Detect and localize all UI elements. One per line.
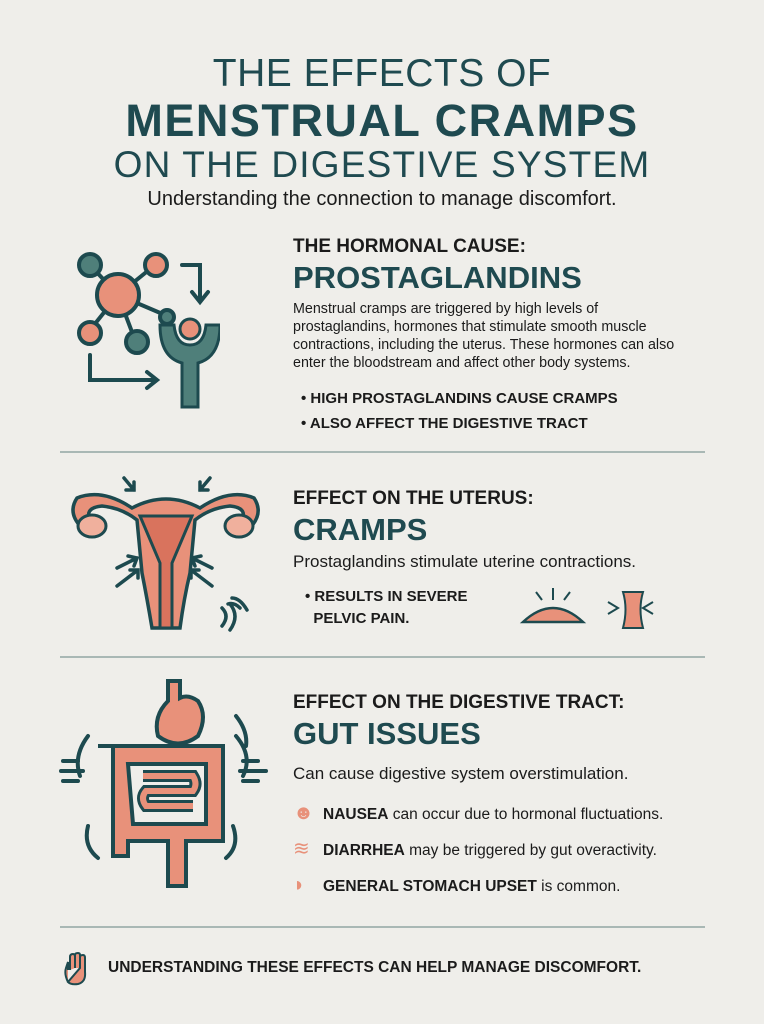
bullets (301, 390, 618, 432)
paragraph: Menstrual cramps are triggered by high levels of (293, 301, 598, 317)
list: symptoms: ☻ (293, 802, 314, 824)
title: ON THE DIGESTIVE SYSTEM (114, 144, 650, 185)
paragraph (293, 301, 674, 371)
section 1 text (293, 236, 674, 432)
icon: digestive tract (59, 679, 268, 888)
bullets: • HIGH PROSTAGLANDINS CAUSE CRAMPS (301, 390, 618, 407)
icon: contraction (520, 588, 654, 629)
bullets: • ALSO AFFECT THE DIGESTIVE TRACT (301, 415, 588, 432)
title (114, 52, 650, 185)
bullet (305, 588, 468, 627)
icon: uterus (71, 476, 260, 632)
icon: hand (64, 952, 86, 986)
list: symptoms: ≋ (293, 838, 310, 860)
title: THE EFFECTS OF (213, 52, 551, 95)
bullet: • RESULTS IN SEVERE (305, 588, 468, 605)
paragraph: prostaglandins, hormones that stimulate smooth muscle (293, 319, 647, 335)
list: symptoms: GENERAL STOMACH UPSET is common. (323, 878, 620, 895)
heading: uterus: EFFECT ON THE UTERUS: (293, 488, 534, 509)
list: symptoms: DIARRHEA may be triggered by gut overactivity. (323, 842, 657, 859)
heading: gut issues: GUT ISSUES (293, 716, 481, 751)
section 2 text (293, 488, 636, 627)
bullet: PELVIC PAIN. (313, 610, 409, 627)
paragraph: contractions, including the uterus. These hormones can also (293, 337, 674, 353)
text: Can cause digestive system overstimulation. (293, 764, 628, 783)
subtitle: Understanding the connection to manage discomfort. (147, 188, 617, 210)
title: MENSTRUAL CRAMPS (125, 95, 639, 146)
heading: hormonal cause: THE HORMONAL CAUSE: (293, 236, 526, 257)
paragraph: enter the bloodstream and affect other body systems. (293, 355, 630, 371)
icon: prostaglandin molecule and receptor (77, 252, 220, 408)
list: symptoms: NAUSEA can occur due to hormonal fluctuations. (323, 806, 663, 823)
footer text: UNDERSTANDING THESE EFFECTS CAN HELP MANAGE DISCOMFORT. (108, 959, 641, 976)
list: symptoms (293, 802, 663, 896)
text: Prostaglandins stimulate uterine contractions. (293, 552, 636, 571)
section 3 text (293, 692, 663, 896)
heading: digestive tract: EFFECT ON THE DIGESTIVE TRACT: (293, 692, 624, 713)
heading: cramps: CRAMPS (293, 512, 427, 547)
list: symptoms: ◗ (293, 874, 305, 896)
heading: prostaglandins: PROSTAGLANDINS (293, 260, 582, 295)
footer (64, 952, 641, 986)
